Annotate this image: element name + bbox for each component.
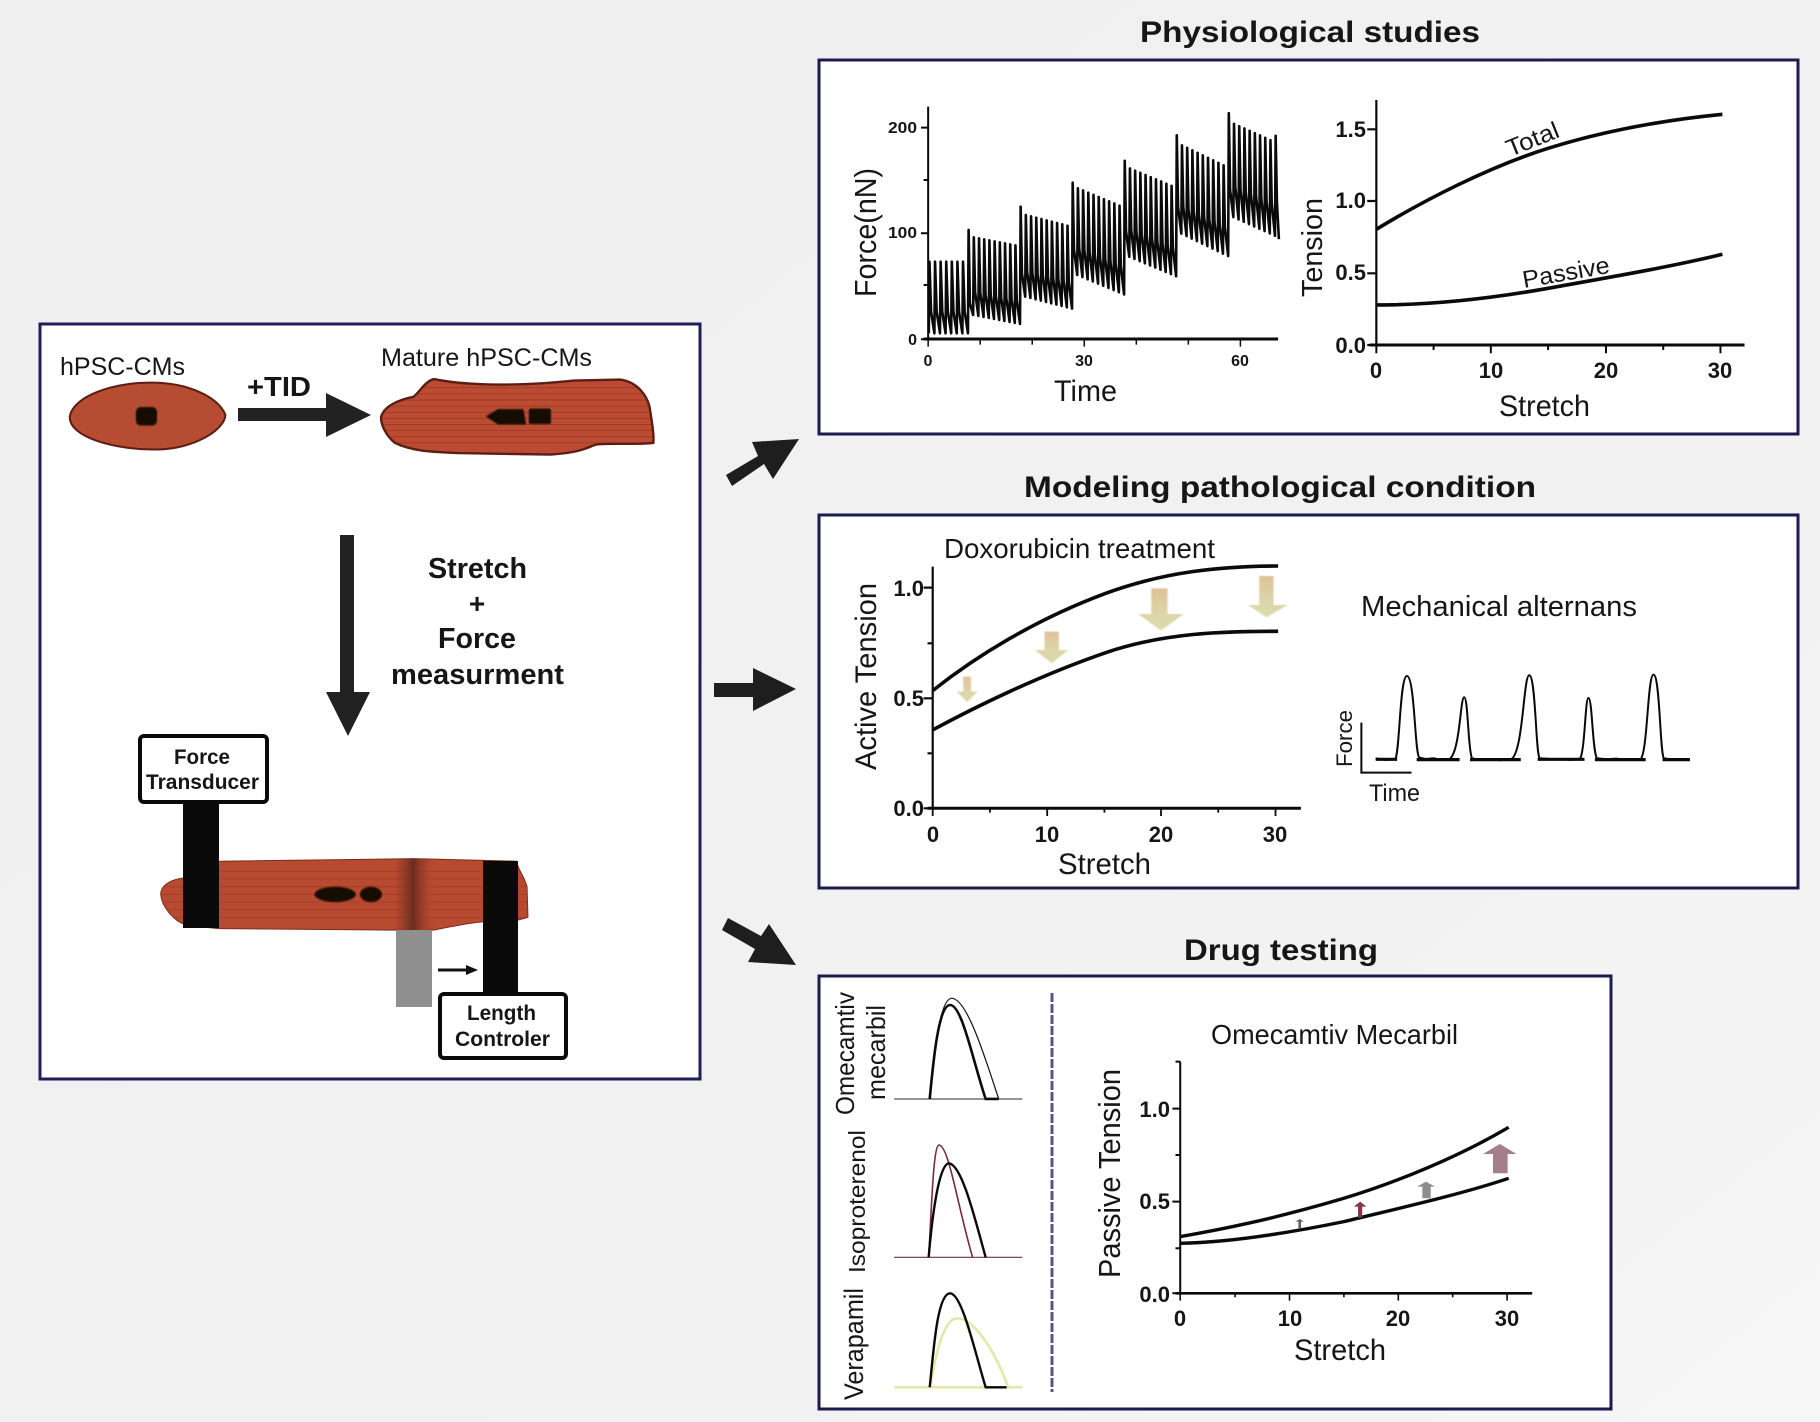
chart: omecamtiv mecarbil passive tension: [1092, 1019, 1532, 1367]
chart: doxorubicin active tension: [850, 533, 1301, 881]
chart: omecamtiv mecarbil passive tension: 0.5: [1139, 1189, 1170, 1214]
chart: tension vs stretch: 0: [1370, 358, 1382, 383]
label: Stretch + Force measurment: measurment: [391, 659, 564, 691]
chart: force over time: 0: [908, 332, 917, 349]
chart: omecamtiv mecarbil passive tension: 30: [1495, 1306, 1519, 1331]
chart: tension vs stretch: 0.5: [1335, 260, 1366, 285]
label: Stretch + Force measurment: +: [469, 588, 485, 619]
chart: force over time: 60: [1231, 353, 1249, 370]
box: Force Transducer: Transducer: [146, 771, 259, 794]
chart: mechanical alternans: Mechanical alternans: [1361, 591, 1637, 623]
chart: verapamil transient: Verapamil: [839, 1288, 869, 1400]
chart: tension vs stretch: Stretch: [1499, 390, 1590, 423]
arrow: to drug testing: [722, 918, 796, 965]
label: Stretch + Force measurment: Force: [438, 623, 516, 655]
chart: force over time: 0: [924, 353, 933, 370]
box: Length Controler: Controler: [455, 1028, 550, 1051]
heading: Physiological studies: Physiological studies: [1140, 16, 1480, 49]
heading: Drug testing: Drug testing: [1184, 934, 1378, 967]
chart: doxorubicin active tension: 0: [927, 822, 939, 847]
chart: tension vs stretch: 10: [1479, 358, 1503, 383]
chart: omecamtiv mecarbil transient: mecarbil: [861, 1005, 891, 1100]
chart: omecamtiv mecarbil passive tension: 0.0: [1139, 1282, 1170, 1307]
arrow: to pathological modeling: [714, 668, 796, 711]
chart: force over time: 200: [888, 120, 917, 137]
box: Force Transducer: [140, 736, 267, 802]
chart: tension vs stretch: 0.0: [1335, 333, 1366, 358]
chart: tension vs stretch: 1.0: [1335, 188, 1366, 213]
chart: doxorubicin active tension: 0.0: [893, 796, 924, 821]
label: hPSC-CMs: hPSC-CMs: [60, 353, 185, 381]
label: Mature hPSC-CMs: Mature hPSC-CMs: [381, 344, 592, 372]
chart: force over time: 30: [1075, 353, 1093, 370]
chart: omecamtiv mecarbil passive tension: Omecamtiv Mecarbil: [1211, 1019, 1458, 1050]
chart: tension vs stretch: [1297, 100, 1745, 423]
arrow: stretch step: [326, 535, 370, 736]
label: Stretch + Force measurment: Stretch: [428, 553, 527, 585]
icon: stretched cardiomyocyte on measurement rig: [161, 803, 528, 1007]
chart: doxorubicin active tension: Active Tension: [850, 583, 883, 770]
panel: modeling pathological condition: [819, 515, 1798, 888]
chart: mechanical alternans: [1332, 591, 1690, 807]
label: Stretch + Force measurment: [391, 553, 564, 691]
chart: doxorubicin active tension: Stretch: [1058, 848, 1151, 881]
chart: doxorubicin active tension: 10: [1035, 822, 1059, 847]
chart: isoproterenol transient: Isoproterenol: [844, 1130, 870, 1273]
chart: verapamil transient: [839, 1288, 1022, 1400]
chart: doxorubicin active tension: 20: [1149, 822, 1173, 847]
chart: force over time: 100: [888, 225, 917, 242]
box: Force Transducer: Force: [174, 746, 230, 769]
chart: omecamtiv mecarbil transient: [830, 992, 1022, 1115]
chart: tension vs stretch: Total: [1502, 117, 1563, 163]
chart: omecamtiv mecarbil passive tension: 20: [1386, 1306, 1410, 1331]
chart: mechanical alternans: Force: [1332, 710, 1357, 767]
label: +TID: +TID: [247, 371, 311, 402]
icon: mature cardiomyocyte: [381, 379, 654, 455]
chart: omecamtiv mecarbil passive tension: 1.0: [1139, 1097, 1170, 1122]
panel: drug testing: [819, 976, 1611, 1409]
chart: doxorubicin active tension: 30: [1263, 822, 1287, 847]
box: Length Controler: Length: [467, 1002, 536, 1025]
chart: omecamtiv mecarbil transient: Omecamtiv: [830, 992, 860, 1115]
chart: doxorubicin active tension: Doxorubicin treatment: [944, 533, 1215, 564]
chart: force over time: Time: [1054, 375, 1117, 408]
chart: isoproterenol transient: [844, 1130, 1022, 1273]
chart: omecamtiv mecarbil passive tension: Passive Tension: [1092, 1069, 1127, 1278]
chart: force over time: [848, 107, 1279, 408]
chart: tension vs stretch: Passive: [1520, 252, 1612, 294]
chart: omecamtiv mecarbil passive tension: 0: [1174, 1306, 1186, 1331]
arrow: maturation: [238, 393, 371, 437]
chart: doxorubicin active tension: 1.0: [893, 576, 924, 601]
panel: physiological studies: [819, 60, 1798, 434]
chart: force over time: Force(nN): [848, 168, 883, 297]
chart: tension vs stretch: 1.5: [1335, 117, 1366, 142]
icon: immature cardiomyocyte: [70, 383, 225, 449]
chart: tension vs stretch: 30: [1708, 358, 1732, 383]
chart: doxorubicin active tension: 0.5: [893, 686, 924, 711]
arrow: to physiological studies: [726, 439, 799, 486]
box: Length Controler: [440, 994, 566, 1058]
heading: Modeling pathological condition: Modeling pathological condition: [1024, 471, 1536, 504]
chart: tension vs stretch: 20: [1594, 358, 1618, 383]
panel: hPSC-CM maturation and stretch setup: [40, 324, 700, 1079]
chart: mechanical alternans: Time: [1369, 780, 1420, 807]
chart: omecamtiv mecarbil passive tension: 10: [1278, 1306, 1302, 1331]
chart: tension vs stretch: Tension: [1297, 198, 1329, 297]
chart: omecamtiv mecarbil passive tension: Stretch: [1294, 1334, 1386, 1367]
